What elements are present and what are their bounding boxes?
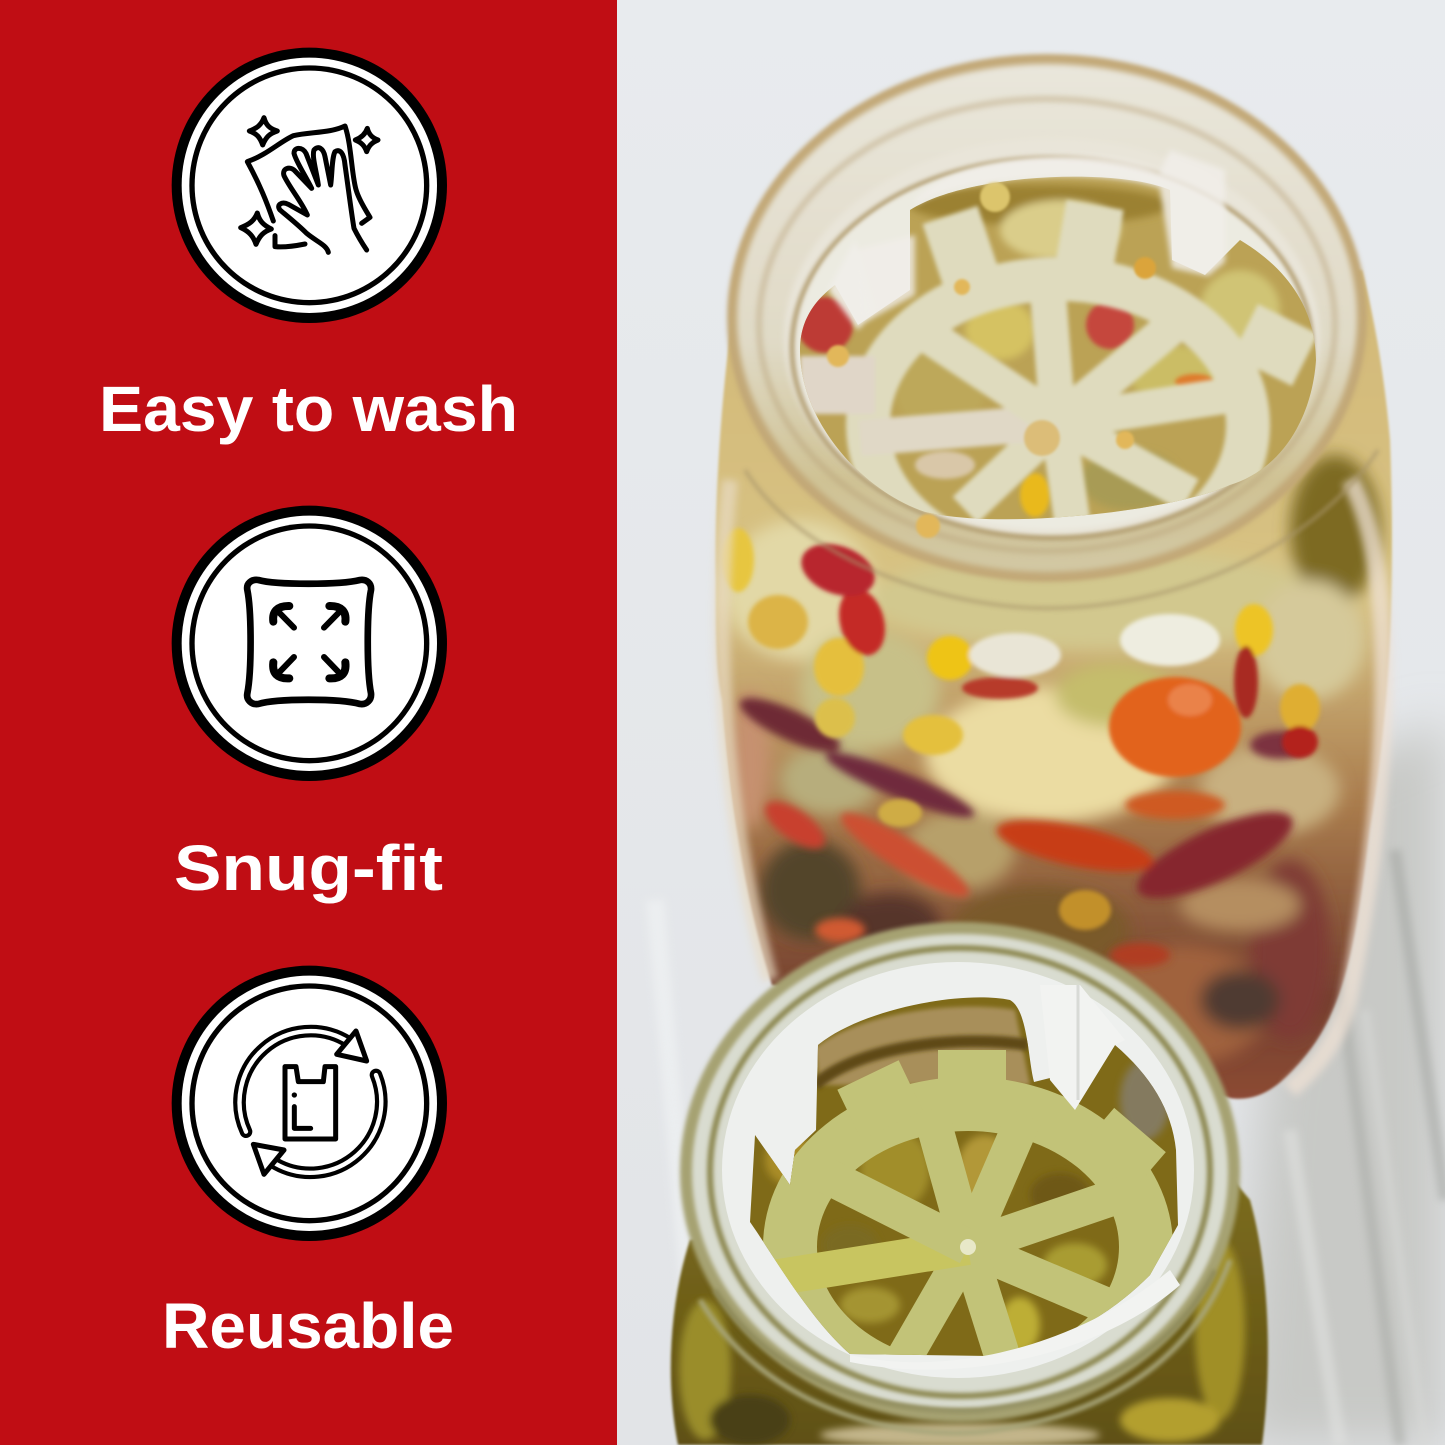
- small jar body: [671, 1170, 1268, 1445]
- red side panel: [0, 0, 617, 1445]
- glass wall highlights: [722, 480, 1384, 1090]
- white insert tabs: [850, 985, 1180, 1370]
- heading: Snug-fit: Snug-fit: [174, 832, 443, 904]
- heading: Reusable: Reusable: [162, 1290, 454, 1362]
- large jar rim and glass mouth: [727, 54, 1378, 608]
- heading: Easy to wash: Easy to wash: [99, 373, 518, 445]
- small orange and mustard seeds: [827, 182, 1156, 538]
- icon: hand wiping with cloth, ring badge: [172, 48, 447, 323]
- icon: stretching square, ring badge: [172, 506, 447, 781]
- small jar rim and glass mouth: [680, 922, 1240, 1433]
- icon: reusable bag with circular arrows, ring badge: [172, 966, 447, 1241]
- wood tone in lower right: [1240, 720, 1445, 1445]
- large jar body with vegetables: [716, 270, 1392, 1099]
- small jar contents with green wheel insert: [740, 985, 1190, 1390]
- wheel centre peg: [960, 1239, 976, 1255]
- photo panel: two pickle jars on white wood: [617, 0, 1445, 1445]
- translucent white insert tabs: [828, 150, 1225, 330]
- large jar contents with translucent wheel insert: [800, 152, 1316, 540]
